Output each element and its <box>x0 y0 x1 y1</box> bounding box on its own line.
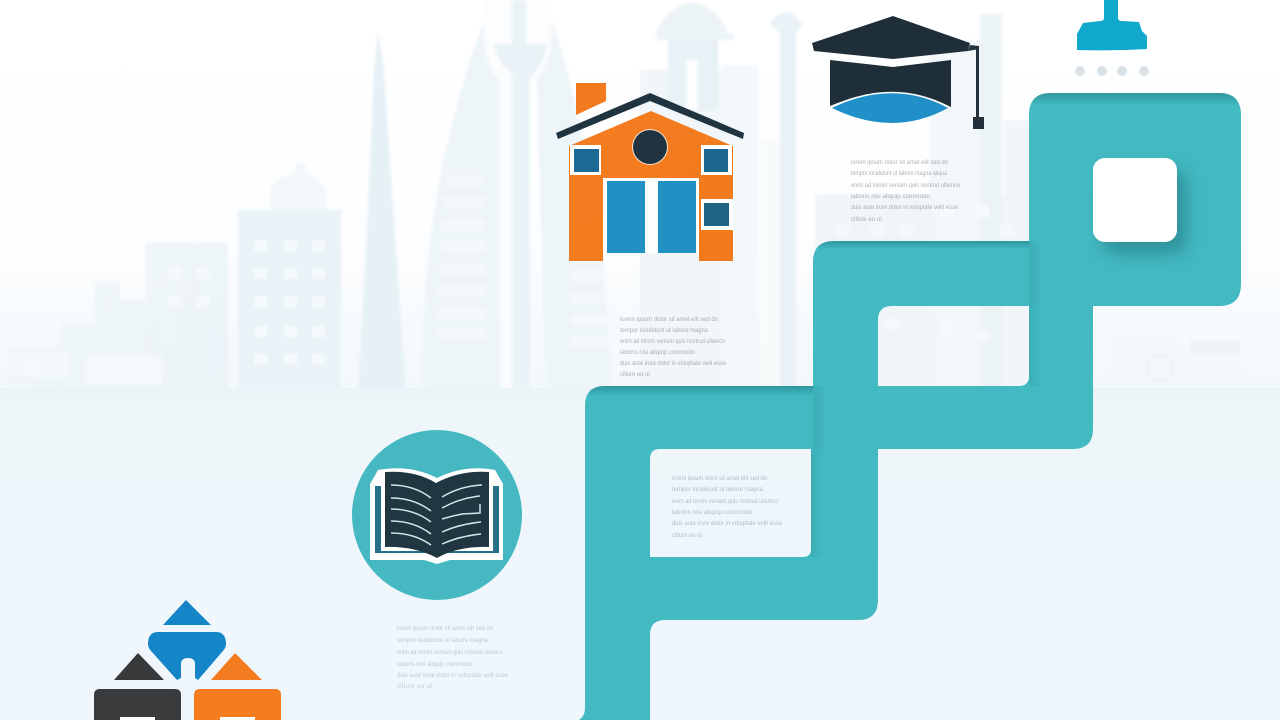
icon: house <box>556 83 744 261</box>
text block: below house: tempor incididunt ut labore magna <box>620 328 709 334</box>
text block: above middle step: lorem ipsum dolor sit amet elit sed do <box>851 160 949 166</box>
white square window <box>1093 158 1177 242</box>
text block: inside lower window: enim ad minim veniam quis nostrud ullamco <box>672 499 779 505</box>
text block: inside lower window: tempor incididunt ut labore magna <box>672 487 764 493</box>
text block: below house: lorem ipsum dolor sit amet elit sed do <box>620 317 719 323</box>
background city skyline <box>8 0 1240 388</box>
text block: right of bottom icon: enim ad minim veniam quis nostrud ullamco <box>397 650 504 656</box>
text block: right of bottom icon: tempor incididunt ut labore magna <box>397 638 489 644</box>
text block: below house: duis aute irure dolor in voluptate velit esse <box>620 361 727 367</box>
text block: above middle step <box>851 160 961 223</box>
text block: right of bottom icon: laboris nisi aliquip commodo <box>397 662 473 668</box>
text block: inside lower window <box>672 476 783 539</box>
skyline windows and details <box>14 175 1014 384</box>
text block: below house: laboris nisi aliquip commodo <box>620 350 696 356</box>
icon: top-right cyan stamp <box>1075 0 1149 76</box>
path shading <box>585 93 1241 557</box>
icon: graduation cap <box>812 16 984 129</box>
icon: open book in teal circle <box>352 430 522 600</box>
text block: below house <box>620 317 727 378</box>
text block: above middle step: enim ad minim veniam quis nostrud ullamco <box>851 183 961 189</box>
text block: inside lower window: duis aute irure dolor in voluptate velit esse <box>672 521 783 527</box>
text block: inside lower window: laboris nisi aliquip commodo <box>672 510 753 516</box>
text block: above middle step: duis aute irure dolor in voluptate velit esse <box>851 205 959 211</box>
text block: above middle step: cillum eu ut <box>851 217 882 223</box>
text block: inside lower window: cillum eu ut <box>672 533 702 539</box>
text block: above middle step: tempor incididunt ut labore magna aliqua <box>851 171 948 177</box>
text block: above middle step: laboris nisi aliquip commodo <box>851 194 931 200</box>
text block: below house: cillum eu ut <box>620 372 650 378</box>
icon: bottom-left house blocks <box>94 600 281 720</box>
text block: right of bottom icon: lorem ipsum dolor sit amet elit sed do <box>397 626 494 632</box>
text block: below house: enim ad minim veniam quis nostrud ullamco <box>620 339 726 345</box>
text block: right of bottom icon: cillum eu ut <box>397 684 432 690</box>
text block: inside lower window: lorem ipsum dolor sit amet elit sed do <box>672 476 768 482</box>
text block: right of bottom icon: duis aute irure dolor in voluptate velit esse <box>397 673 509 679</box>
teal stepped path <box>579 93 1241 720</box>
text block: right of bottom icon <box>397 626 509 690</box>
